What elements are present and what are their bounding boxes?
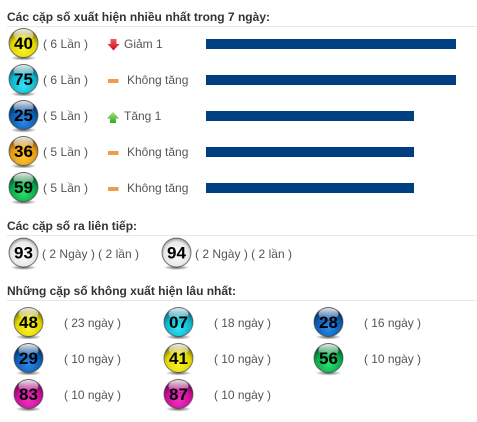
ball 48: 48 [19,313,38,332]
ball 83: 83 [19,385,38,404]
ball 40: 40 [14,34,33,53]
trend label: Tăng 1 [124,109,162,123]
ball 48 [14,308,43,340]
ball 87 [164,380,193,412]
row 75 [9,64,456,96]
panel: longest absent pairs [14,308,421,412]
ball 59 [9,172,38,204]
text 07: ( 18 ngày ) [214,316,271,330]
ball 28 [314,308,343,340]
text 94: ( 2 Ngày ) ( 2 lần ) [195,247,292,261]
ball 59: 59 [14,178,33,197]
ball 29 [14,344,43,376]
ball 56: 56 [319,349,338,368]
text 29: ( 10 ngày ) [64,352,121,366]
ball 93: 93 [14,244,33,262]
icon: orange dash [108,187,118,191]
ball 93 [9,238,38,270]
row 36 [9,136,414,168]
ball 25: 25 [14,106,33,125]
text 93: ( 2 Ngày ) ( 2 lần ) [42,247,139,261]
ball 29: 29 [19,349,38,368]
ball 83 [14,380,43,412]
ball 75 [9,64,38,96]
icon: green up arrow [107,112,119,123]
ball 41 [164,344,193,376]
trend label: Không tăng [127,73,188,87]
ball 07 [164,308,193,340]
panel: most frequent pairs [9,28,456,204]
ball 87: 87 [169,385,188,404]
trend label: Không tăng [127,181,188,195]
row 59 [9,172,414,204]
row 40 [9,28,456,60]
text 87: ( 10 ngày ) [214,388,271,402]
icon: orange dash [108,79,118,83]
bar [206,111,414,121]
bar [206,75,456,85]
ball 25 [9,100,38,132]
icon: red down arrow [108,39,120,50]
icon: orange dash [108,151,118,155]
ball 75: 75 [14,70,33,89]
count: ( 5 Lần ) [43,109,88,123]
trend label: Giảm 1 [124,37,163,51]
ball 94 [162,238,191,270]
text 41: ( 10 ngày ) [214,352,271,366]
text 56: ( 10 ngày ) [364,352,421,366]
count: ( 6 Lần ) [43,37,88,51]
ball 56 [314,344,343,376]
panel: consecutive pairs [9,238,292,270]
text 48: ( 23 ngày ) [64,316,121,330]
count: ( 5 Lần ) [43,181,88,195]
row 25 [9,100,414,132]
heading: consecutive pairs: Các cặp số ra liên tiếp: [7,219,137,233]
count: ( 6 Lần ) [43,73,88,87]
heading: most frequent pairs: Các cặp số xuất hiện nhiều nhất trong 7 ngày: [7,10,270,24]
bar [206,147,414,157]
trend label: Không tăng [127,145,188,159]
heading: longest absent pairs: Những cặp số không xuất hiện lâu nhất: [7,284,236,298]
ball 28: 28 [319,313,338,332]
text 83: ( 10 ngày ) [64,388,121,402]
ball 94: 94 [167,244,186,262]
ball 36 [9,136,38,168]
ball 07: 07 [169,313,188,332]
text 28: ( 16 ngày ) [364,316,421,330]
count: ( 5 Lần ) [43,145,88,159]
bar [206,39,456,49]
ball 40 [9,28,38,60]
ball 36: 36 [14,142,33,161]
bar [206,183,414,193]
ball 41: 41 [169,349,188,368]
